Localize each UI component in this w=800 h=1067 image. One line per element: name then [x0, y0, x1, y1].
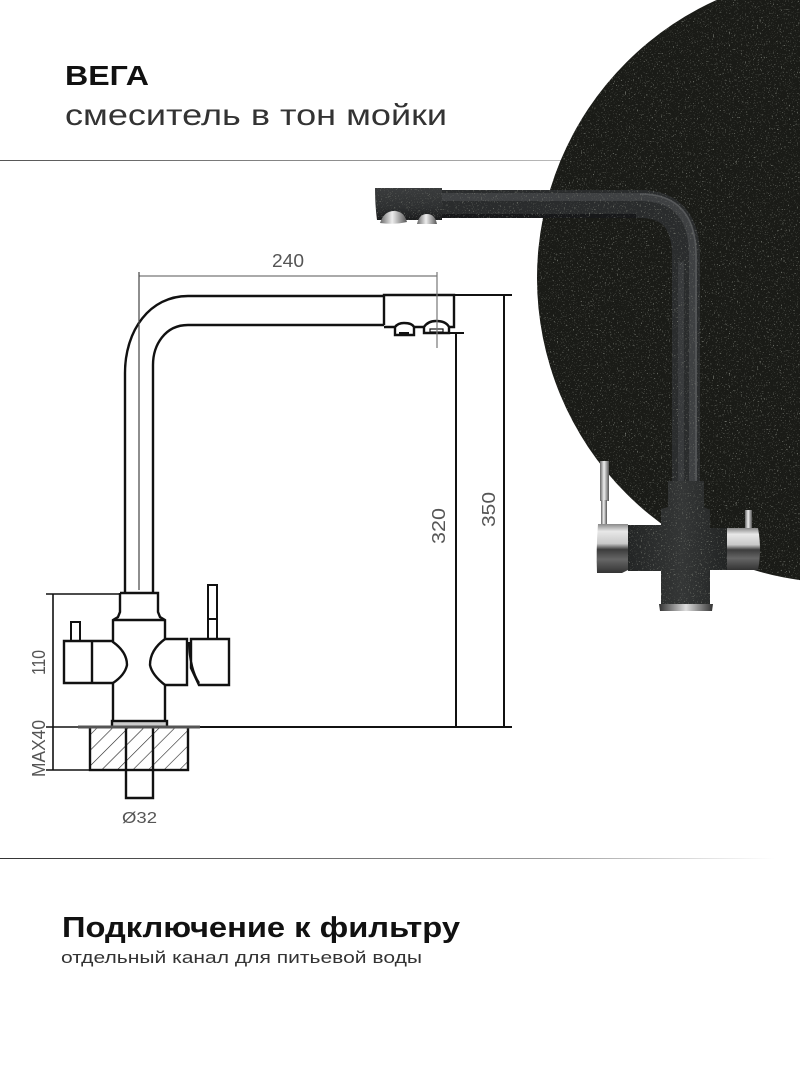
- subtitle: смеситель в тон мойки: [65, 99, 447, 132]
- faucet spout: [440, 194, 696, 484]
- aerator nozzles: [380, 211, 437, 224]
- right chrome handle: [727, 528, 760, 570]
- label 350: 350: [479, 492, 499, 527]
- right lever: [745, 510, 752, 530]
- dimension lines: [449, 295, 512, 727]
- left dimension lines: [46, 594, 120, 770]
- left chrome handle: [597, 524, 628, 573]
- title: ВЕГА: [65, 60, 149, 91]
- product photo: granite faucet: [375, 188, 760, 611]
- technical drawing: [46, 272, 512, 798]
- gray dimension 240: [139, 272, 437, 348]
- spout head: [375, 188, 442, 220]
- faucet body: [628, 481, 727, 604]
- base plate: [112, 721, 167, 727]
- stem: [126, 727, 153, 798]
- base ring: [659, 604, 713, 611]
- spout head: [384, 295, 454, 327]
- spout outline: [125, 296, 384, 593]
- top divider: [0, 160, 565, 161]
- label 320: 320: [429, 508, 449, 544]
- faucet base: [113, 593, 165, 721]
- centre line: [138, 272, 140, 590]
- label 110: 110: [29, 650, 49, 675]
- label MAX40: MAX40: [29, 720, 49, 777]
- left lever: [600, 461, 609, 527]
- feature heading: Подключение к фильтру: [62, 912, 460, 944]
- deck line: [188, 726, 512, 728]
- right lever: [208, 585, 217, 639]
- label diameter 32: Ø32: [122, 810, 157, 827]
- label 240: 240: [272, 251, 304, 271]
- feature description: отдельный канал для питьевой воды: [61, 948, 422, 967]
- dimension labels: [29, 251, 499, 827]
- hatched block: [90, 727, 188, 770]
- background circle: granite sink surface: [537, 0, 800, 583]
- left lever small: [71, 622, 80, 641]
- nozzles: [395, 321, 449, 335]
- right handle: [165, 639, 187, 685]
- left handle: [64, 641, 113, 683]
- bottom divider: [0, 858, 775, 859]
